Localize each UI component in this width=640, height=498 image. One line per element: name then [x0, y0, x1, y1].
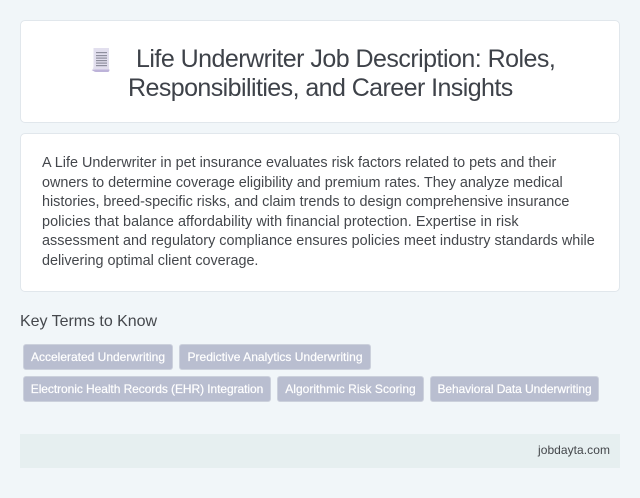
tag — [179, 344, 371, 370]
description text: policies that balance affordability with financial protection. Expertise in risk — [42, 214, 519, 230]
description text: histories, breed-specific risks, and claim trends to design comprehensive insurance — [42, 194, 569, 210]
title: Life Underwriter Job Description: Roles, — [136, 45, 555, 73]
description text: delivering optimal client coverage. — [42, 253, 258, 269]
description text: A Life Underwriter in pet insurance evaluates risk factors related to pets and their — [42, 155, 556, 171]
tag: Electronic Health Records (EHR) Integration — [31, 382, 263, 396]
tag — [23, 344, 173, 370]
tag: Predictive Analytics Underwriting — [187, 350, 363, 364]
heading: key terms: Key Terms to Know — [20, 313, 157, 330]
description text: assessment and regulatory compliance ensures policies meet industry standards while — [42, 233, 595, 249]
tag list — [23, 344, 599, 402]
footer bar — [20, 434, 620, 468]
description text — [42, 155, 595, 269]
description text: owners to determine coverage eligibility and premium rates. They analyze medical — [42, 175, 563, 191]
tag: Algorithmic Risk Scoring — [285, 382, 416, 396]
title: Responsibilities, and Career Insights — [128, 74, 513, 102]
icon: document scroll — [92, 48, 110, 72]
tag — [23, 376, 271, 402]
tag — [277, 376, 424, 402]
source credit: jobdayta.com — [538, 443, 610, 457]
tag: Accelerated Underwriting — [31, 350, 165, 364]
tag — [430, 376, 599, 402]
title — [128, 45, 555, 102]
tag: Behavioral Data Underwriting — [437, 382, 592, 396]
header panel — [20, 20, 620, 123]
description panel — [20, 133, 620, 292]
